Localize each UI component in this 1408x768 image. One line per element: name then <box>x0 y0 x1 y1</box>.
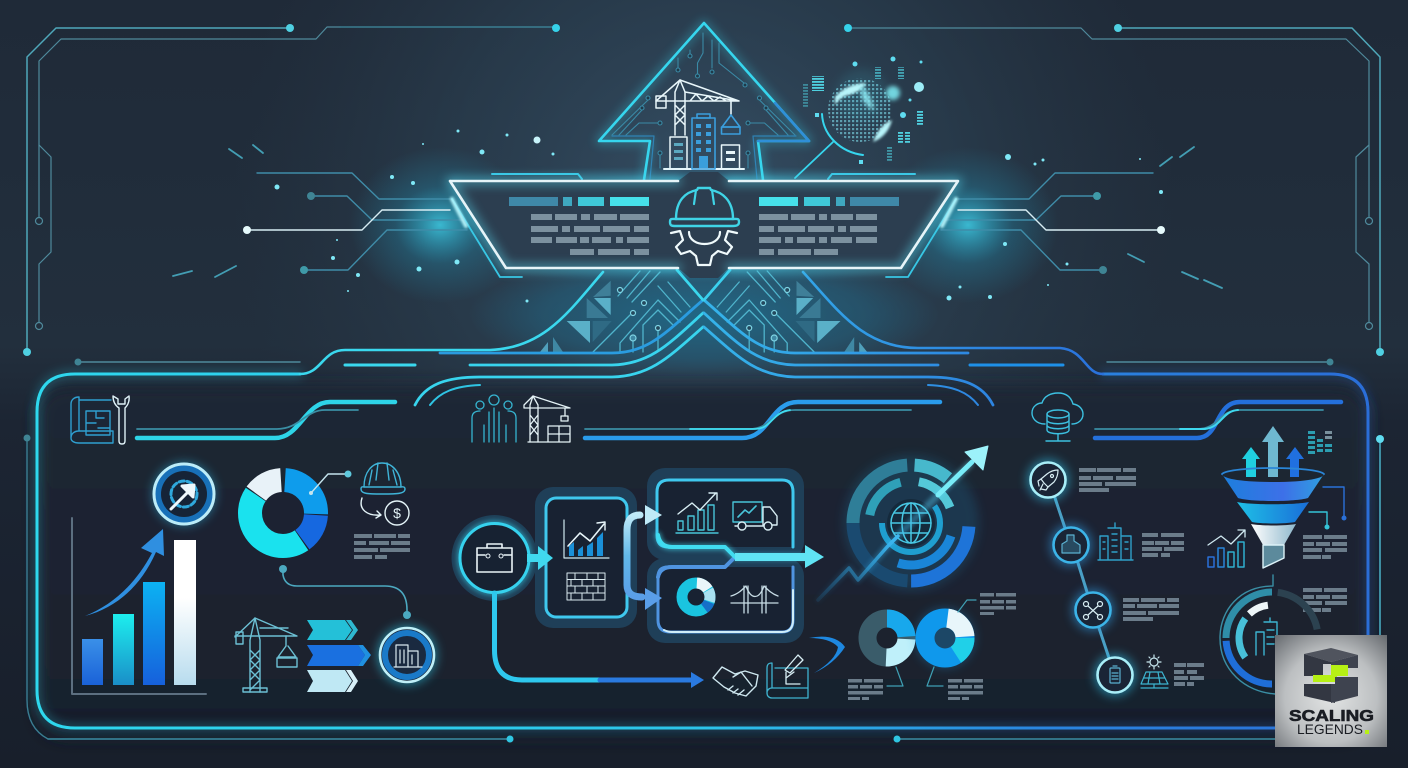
section 1: helmet and dollar icon <box>361 463 409 525</box>
icon: digital globe with data marks <box>795 56 924 178</box>
logo: Scaling Legends <box>1275 635 1387 747</box>
logo text: LEGENDS <box>1297 721 1363 737</box>
logo mark <box>1304 648 1358 703</box>
icon: hard hat and gear <box>670 188 739 265</box>
section 2: donut captions <box>848 593 1016 700</box>
section 2: L-shaped path arrow <box>494 593 704 688</box>
growth chart icon <box>676 493 718 533</box>
right circuit lines with dots <box>940 173 1165 274</box>
section 1: header blueprint icon <box>71 396 129 444</box>
circuit traces inside arrow <box>612 33 795 168</box>
section 1: bar chart with growth arrow <box>72 518 206 694</box>
section 3: funnel callouts <box>1309 487 1346 530</box>
top-right circuit frame <box>844 24 1384 356</box>
section 2: header double line <box>585 402 940 438</box>
section 1: crane icon <box>235 618 297 692</box>
section 3: radial city gauge <box>1220 575 1318 694</box>
section 3: network node <box>1072 589 1114 631</box>
section 1: caption lines <box>354 534 410 559</box>
section 3: city node <box>1050 524 1092 566</box>
section 3: rocket node <box>1027 459 1069 501</box>
section 2: merging output arrow <box>658 535 824 577</box>
logo text: SCALING <box>1289 708 1374 725</box>
outer bottom and side rails <box>24 358 1384 742</box>
line and bar mini chart <box>564 520 609 558</box>
circuit pattern under banner <box>540 271 867 352</box>
section 3: timeline captions <box>1079 468 1204 686</box>
section 3: header double line <box>1095 402 1341 438</box>
central banner <box>450 172 958 278</box>
bridge icon <box>731 586 778 613</box>
small glowing ledges beside banner <box>452 174 956 277</box>
section 3: funnel with arrows <box>1222 426 1324 568</box>
left circuit lines with dots <box>243 173 470 274</box>
section 1: three chevron arrows <box>307 620 371 692</box>
icon: crane and city inside arrow <box>656 80 744 169</box>
logo text <box>1289 708 1374 737</box>
banner left text lines <box>509 197 649 255</box>
section 2: team and crane icons <box>472 395 570 442</box>
donut leader lines <box>887 600 976 686</box>
light streaks and particles <box>173 130 1222 302</box>
truck icon <box>733 502 777 530</box>
section 2: blueprint with pencil <box>767 655 808 698</box>
banner right text lines <box>759 197 899 255</box>
section 2: upper process box <box>647 468 804 560</box>
section 3: timeline connector <box>1055 498 1109 658</box>
section 2: curved swoosh <box>809 637 845 673</box>
section 2: arrow into first box <box>527 546 553 570</box>
section 3: cloud database icon <box>1032 393 1083 441</box>
section 1: building badge <box>377 625 437 685</box>
section 1: helmet and dollar icon: $ <box>393 505 401 521</box>
section 2: handshake icon <box>713 667 758 696</box>
section 2: first process box <box>535 487 637 628</box>
section 1: gear arrow badge <box>152 462 216 526</box>
section 2: radial globe gauge <box>843 455 979 591</box>
section 2: briefcase start node <box>452 515 538 601</box>
top-left circuit frame <box>23 24 560 356</box>
section 2: twin donuts <box>868 600 976 686</box>
section 3: funnel growth chart <box>1208 530 1245 567</box>
section 3: solar panel icon <box>1141 655 1168 688</box>
arrow: upward pointing frame <box>599 23 809 180</box>
left rising curves into chevron <box>300 270 703 405</box>
right rising curves into chevron <box>704 270 1103 405</box>
main panel outline <box>37 374 1368 728</box>
section 2: branching arrows <box>627 505 662 610</box>
section 2: rising zigzag arrow <box>818 446 988 600</box>
section 2: lower process box <box>647 558 804 643</box>
section 1: segmented donut chart <box>250 470 352 546</box>
growth arrow <box>85 529 164 616</box>
section 3: battery node <box>1094 654 1136 696</box>
globe icon <box>891 503 931 543</box>
glow flares around banner <box>350 147 1058 377</box>
section 3: funnel captions <box>1303 535 1347 612</box>
mini donut <box>682 583 710 611</box>
section 3: city icon <box>1098 523 1133 560</box>
section 1: connector to building badge <box>279 565 411 619</box>
section 3: funnel data bars <box>1308 431 1332 454</box>
brick wall icon <box>567 573 605 600</box>
section 1: header double line <box>137 402 395 438</box>
